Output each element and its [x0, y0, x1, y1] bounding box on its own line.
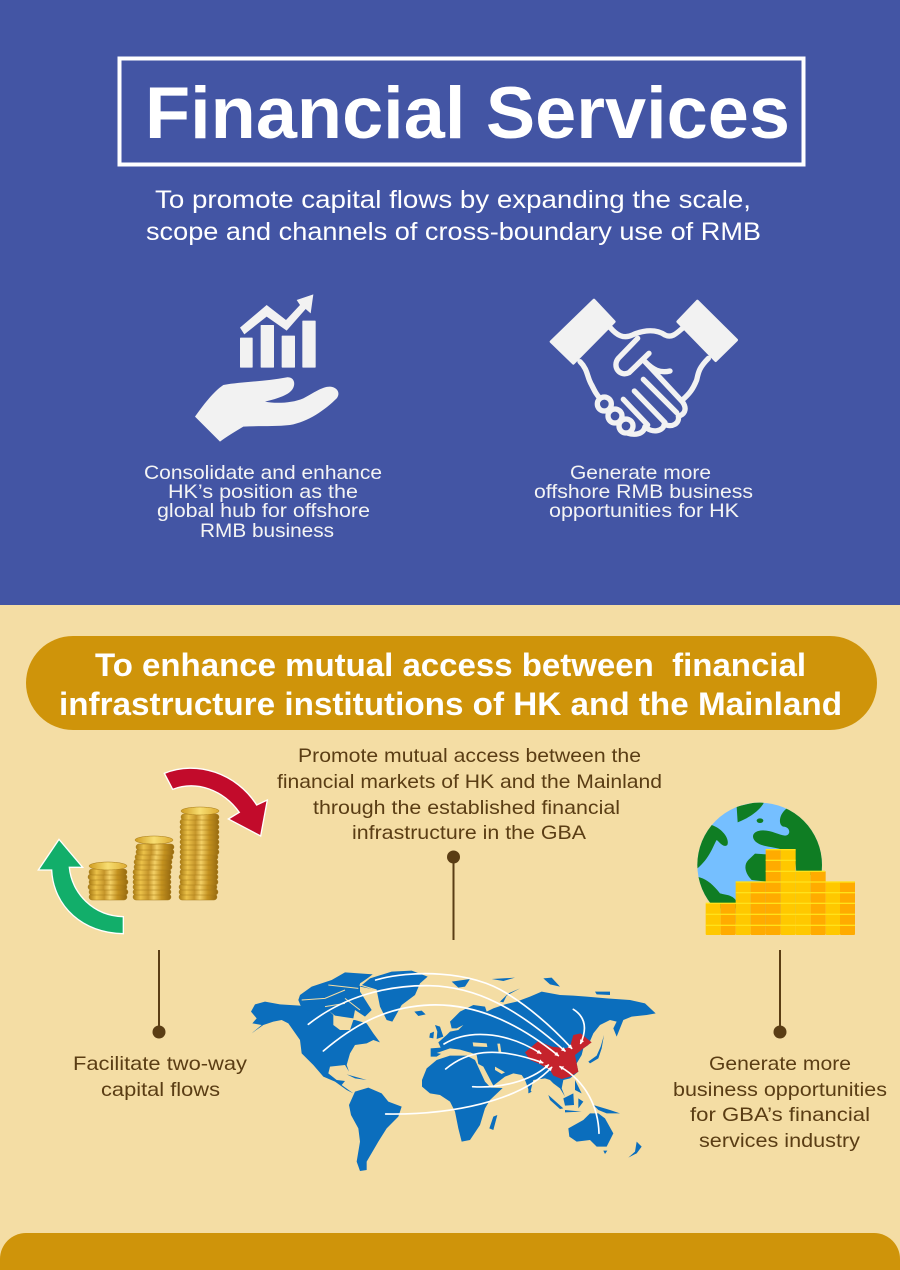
icon: coin stack small [88, 862, 128, 900]
text: offshore hub [144, 462, 382, 542]
icon: coin stack medium [133, 836, 174, 900]
connector: left [152, 950, 166, 1038]
text: business opportunities: services industry [699, 1130, 860, 1152]
text: offshore hub: RMB business [200, 520, 334, 542]
world map [251, 971, 656, 1171]
text: business opportunities: for GBA’s financial [690, 1104, 870, 1126]
text: offshore hub: Consolidate and enhance [144, 462, 382, 484]
map: China [525, 1033, 592, 1079]
map: Eastern hemisphere [308, 974, 656, 1158]
subtitle: scope and channels of cross-boundary use of RMB [146, 218, 761, 246]
heading pill: mutual access: infrastructure institutions of HK and the Mainland [59, 686, 842, 722]
icon: coin stacks with arrows [38, 768, 267, 934]
text: offshore hub: global hub for offshore [157, 500, 370, 522]
text: offshore hub: HK’s position as the [168, 481, 358, 503]
text: promote mutual access: through the established financial [313, 797, 620, 819]
icon: handshake [551, 300, 737, 434]
text: business opportunities [673, 1053, 887, 1152]
text: business opportunities: business opportunities [673, 1079, 887, 1101]
text: two-way capital flows: capital flows [101, 1079, 220, 1101]
text: promote mutual access [277, 745, 662, 844]
panel: tan section [0, 605, 900, 1270]
text: offshore opportunities: opportunities for HK [549, 500, 739, 522]
icon: globe with gold bars [690, 800, 855, 935]
map: Americas and Greenland [251, 971, 428, 1171]
icon: coin stack large [179, 807, 219, 900]
icon: red arrow [164, 768, 267, 836]
text: promote mutual access: financial markets of HK and the Mainland [277, 771, 662, 793]
text: business opportunities: Generate more [709, 1053, 851, 1075]
connector: centre [447, 850, 460, 940]
map: flow arcs [308, 974, 599, 1133]
text: offshore opportunities [534, 462, 753, 522]
title: Financial Services [145, 73, 790, 154]
heading pill: mutual access [26, 636, 877, 730]
text: offshore opportunities: Generate more [570, 462, 711, 484]
panel: blue header [0, 0, 900, 605]
icon: gold bars [706, 849, 855, 935]
icon: green arrow [38, 839, 123, 934]
text: offshore opportunities: offshore RMB business [534, 481, 753, 503]
heading pill: mutual access: To enhance mutual access between financial [95, 647, 806, 683]
text: promote mutual access: infrastructure in the GBA [352, 822, 586, 844]
text: two-way capital flows [73, 1053, 247, 1101]
icon: hand with rising chart [195, 294, 338, 442]
map: Africa [422, 1056, 503, 1142]
text: promote mutual access: Promote mutual access between the [298, 745, 641, 767]
panel: bottom pill [0, 1233, 900, 1270]
text: two-way capital flows: Facilitate two-way [73, 1053, 247, 1075]
map: inland seas [437, 1042, 505, 1074]
subtitle: To promote capital flows by expanding the scale, [155, 186, 751, 214]
connector: right [774, 950, 786, 1038]
subtitle [146, 186, 761, 246]
